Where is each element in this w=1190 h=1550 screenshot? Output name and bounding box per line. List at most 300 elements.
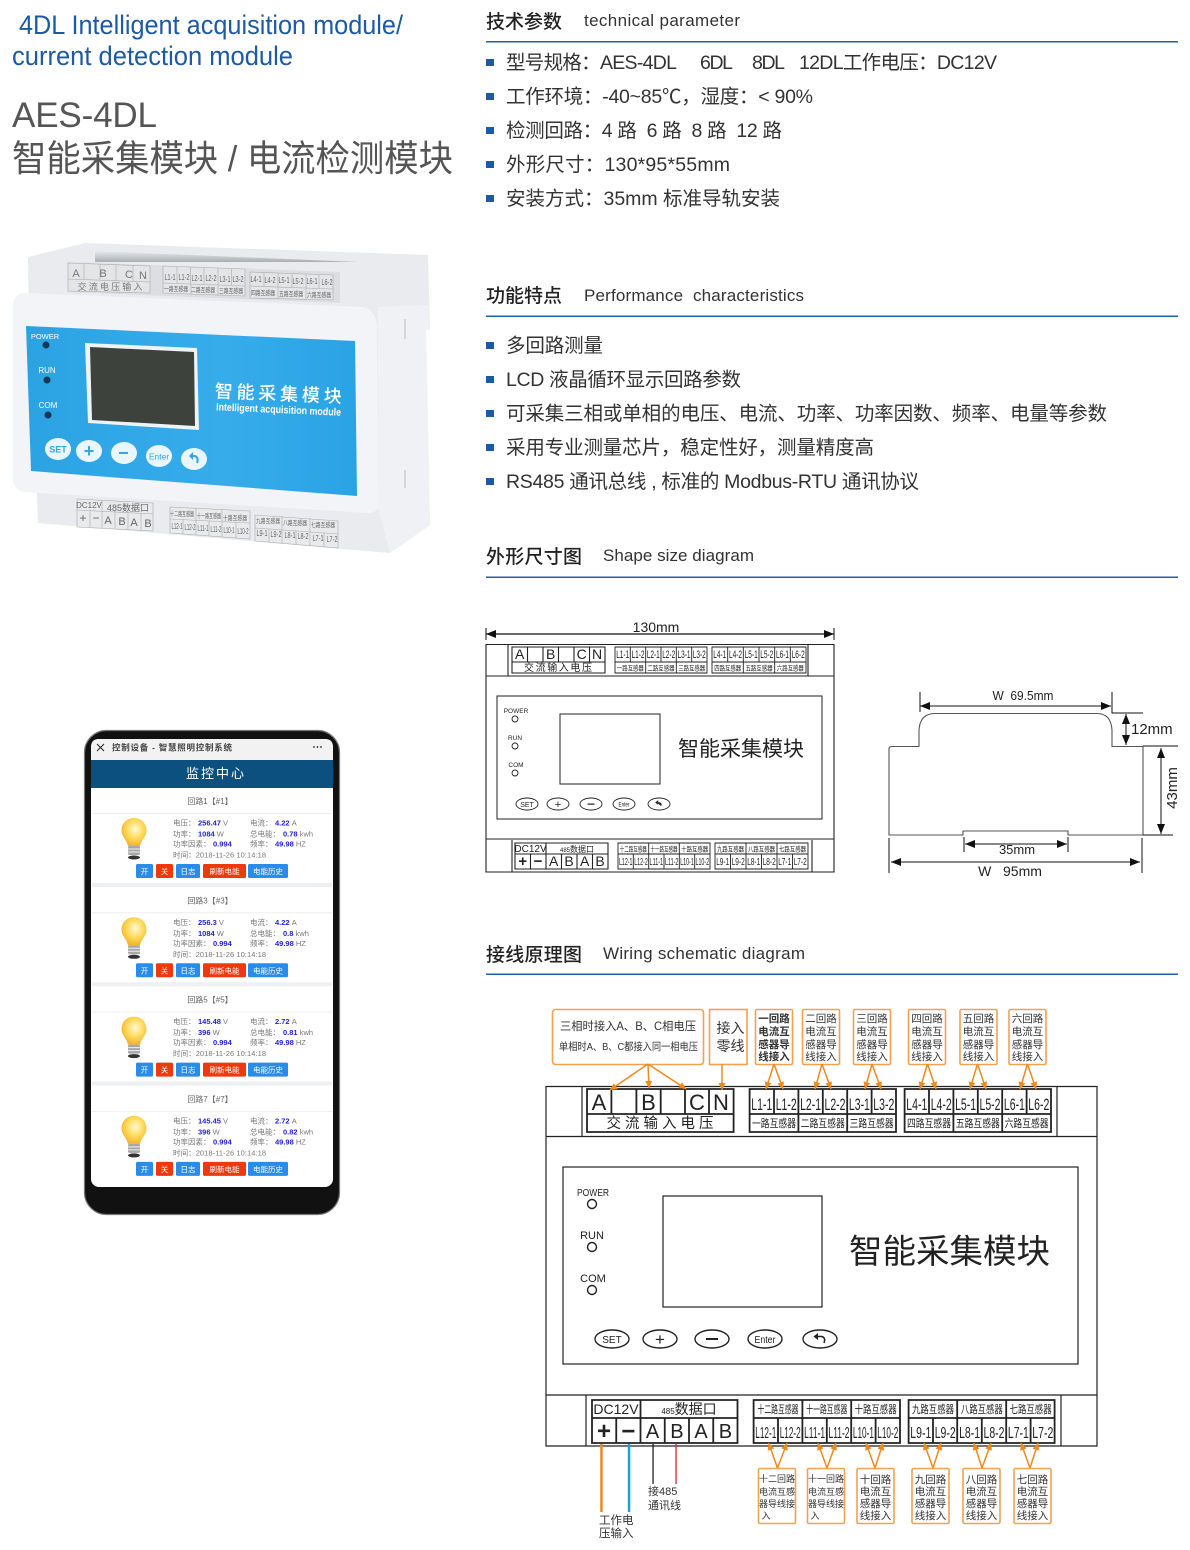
bullet list: parameters: 安装方式：35mm 标准导轨安装 — [506, 188, 780, 210]
card: circuit 3: 4.22 — [275, 918, 290, 927]
bottom terminal labels: L7-1 — [312, 534, 324, 543]
bottom terminal labels: L12-2 — [184, 523, 196, 532]
app status bar — [91, 739, 333, 760]
top terminal labels: L2-1 — [192, 274, 203, 283]
top terminal labels: 二路互感器 — [191, 285, 215, 294]
card: circuit 7: 396 — [198, 1127, 211, 1136]
top terminals: 五路互感器 — [746, 664, 772, 672]
LCD outline — [663, 1196, 822, 1307]
phone frame — [84, 730, 340, 1214]
bottom terminal labels: DC12V — [76, 501, 103, 510]
DC and RS485 terminals: − — [621, 1418, 635, 1445]
dimension: 35mm: 35mm — [999, 842, 1035, 857]
current transformer terminals 7-12: L7-1 — [1008, 1425, 1029, 1442]
callouts: circuits 7-12 — [758, 1468, 1051, 1524]
keypad: + — [555, 799, 561, 811]
card: circuit 3: 时间：2018-11-26 10:14:18 — [173, 949, 266, 959]
card: circuit 7: 开 — [141, 1165, 149, 1174]
bullet list: parameters — [486, 52, 997, 210]
card: circuit 7: 2.72 — [275, 1116, 290, 1125]
card: circuit 5: 电能历史 — [253, 1065, 283, 1075]
card: circuit 5: 功率： — [173, 1027, 196, 1037]
current transformer terminals 1-6: L4-2 — [931, 1095, 952, 1114]
bottom terminals: DC12V — [514, 844, 547, 855]
AC voltage input terminals: N — [713, 1090, 729, 1115]
card: circuit 1: 0.994 — [213, 840, 233, 848]
card: circuit 7: 电能历史 — [253, 1164, 283, 1174]
heading: wiring schematic diagram: Wiring schematic diagram — [603, 944, 805, 963]
panel logo text: Intelligent acquisition module — [216, 401, 341, 419]
panel buttons: Enter — [149, 452, 169, 462]
callouts: circuits 7-12: 线接入 — [1017, 1509, 1049, 1522]
top terminal labels: C — [125, 269, 133, 281]
keypad — [595, 1330, 837, 1349]
heading: wiring schematic diagram — [486, 944, 1178, 975]
top terminals — [512, 646, 806, 674]
top terminals: N — [592, 646, 602, 662]
top terminals: L4-2 — [729, 649, 742, 661]
callouts: circuits 7-12: 十回路 — [860, 1473, 892, 1486]
callouts: circuits 7-12: 电流互感 — [759, 1486, 795, 1497]
card: circuit 1: 电能历史 — [253, 866, 283, 876]
current transformer terminals 1-6: L3-1 — [849, 1095, 870, 1114]
callouts: circuits 7-12: 十一回路 — [808, 1473, 844, 1484]
card: circuit 7: 日志 — [180, 1164, 196, 1174]
card: circuit 1: 关 — [161, 866, 169, 876]
DC and RS485 terminals: A — [646, 1421, 660, 1443]
current transformer terminals 7-12: 十二路互感器 — [758, 1402, 798, 1416]
card: circuit 1: 日志 — [180, 866, 196, 876]
current transformer terminals 1-6: 五路互感器 — [956, 1117, 1000, 1130]
heading: technical parameter: 技术参数 — [486, 11, 562, 33]
callouts: circuits 7-12: 器导线接 — [808, 1498, 844, 1509]
diagram: wiring schematic — [546, 1010, 1097, 1540]
top terminal labels: 三路互感器 — [219, 286, 243, 295]
top terminals: L3-1 — [678, 649, 690, 661]
callouts: circuits 7-12: 感器导 — [915, 1497, 946, 1510]
callouts: circuits 1-6: 感器导 — [963, 1038, 994, 1051]
bottom terminals: L7-1 — [778, 857, 791, 868]
current transformer terminals 1-6: 一路互感器 — [752, 1117, 796, 1130]
label: working voltage input: 工作电 — [599, 1514, 634, 1527]
bullet list: parameters: 12DL工作电压：DC12V — [799, 52, 997, 74]
bottom terminals: L8-1 — [747, 857, 760, 868]
card: circuit 3: 0.8 — [283, 929, 293, 938]
bottom terminals: 九路互感器 — [717, 844, 744, 854]
top terminal labels: L2-2 — [206, 274, 217, 283]
AC voltage input terminals — [587, 1089, 734, 1132]
card: circuit 7: 功率因素： — [173, 1136, 210, 1146]
card: circuit 5: 功率因素： — [173, 1037, 210, 1047]
phone screen — [91, 739, 333, 1187]
callouts: circuits 1-6: 感器导 — [805, 1038, 837, 1051]
bottom terminal labels — [76, 499, 338, 548]
top terminals: 二路互感器 — [648, 664, 674, 672]
card: circuit 3: 刷新电能 — [210, 965, 240, 975]
bottom terminals: B — [564, 853, 574, 869]
card: circuit 3: V — [217, 918, 224, 927]
card: circuit 3: 电能历史 — [253, 965, 283, 975]
card: circuit 1: 刷新电能 — [210, 866, 240, 876]
bottom terminals: L9-2 — [732, 857, 745, 868]
bullet list: parameters: 8DL — [752, 52, 785, 74]
bottom terminals: 七路互感器 — [779, 844, 806, 854]
card: circuit 5: kwh — [298, 1028, 313, 1037]
label: working voltage input: 压输入 — [599, 1526, 634, 1540]
heading: technical parameter — [486, 11, 1178, 42]
current transformer terminals 1-6: L2-2 — [824, 1095, 846, 1114]
callouts: circuits 1-6: 感器导 — [758, 1038, 790, 1051]
bullet list: features — [486, 335, 1107, 493]
card: circuit 5: 关 — [161, 1065, 169, 1075]
card: circuit 1: 0.78 — [283, 830, 298, 838]
current transformer terminals 7-12: L11-2 — [828, 1425, 850, 1442]
status LEDs: POWER — [31, 332, 60, 341]
DC and RS485 terminals: B — [670, 1421, 684, 1443]
callouts: circuits 1-6: 线接入 — [911, 1050, 943, 1063]
title: Chinese product name — [12, 96, 453, 179]
front face — [13, 293, 378, 513]
current transformer terminals 7-12: L8-1 — [959, 1425, 980, 1442]
top terminals: L1-2 — [632, 649, 644, 661]
card: circuit 5: 电流： — [250, 1016, 272, 1026]
label: RS485 line: 通讯线 — [648, 1498, 681, 1512]
card: circuit 5: A — [290, 1017, 297, 1026]
callouts: circuits 7-12: 电流互 — [860, 1485, 891, 1498]
callouts: circuits 1-6: 感器导 — [1012, 1038, 1043, 1051]
card: circuit 5: 刷新电能 — [210, 1065, 240, 1075]
dimension: width 95mm: W 95mm — [978, 863, 1042, 879]
card: circuit 5: W — [211, 1028, 221, 1037]
card: circuit 1: 回路1【#1】 — [187, 796, 233, 806]
card: circuit 7: A — [290, 1116, 297, 1125]
card: circuit 3: 频率： — [250, 938, 272, 948]
callouts: circuits 7-12: 感器导 — [1017, 1497, 1048, 1510]
title: English product name: current detection module — [12, 41, 293, 71]
top terminal labels: L3-2 — [232, 275, 244, 284]
bottom terminal labels: + — [79, 511, 87, 525]
label: RS485 line: 接485 — [648, 1485, 677, 1498]
panel buttons: SET — [49, 444, 67, 454]
card: circuit 7: 总电能： — [250, 1126, 280, 1136]
card: circuit 7: 49.98 — [275, 1137, 294, 1146]
DC and RS485 terminals: DC12V — [593, 1401, 639, 1417]
callouts: circuits 1-6: 电流互 — [963, 1025, 994, 1038]
card: circuit 7: 电压： — [173, 1115, 196, 1125]
callouts: circuits 7-12: 八回路 — [966, 1473, 998, 1486]
card: circuit 5: 396 — [198, 1028, 211, 1037]
top terminals: 一路互感器 — [617, 664, 644, 672]
callouts: circuits 1-6: 线接入 — [856, 1050, 888, 1063]
title: Chinese product name: 智能采集模块 / 电流检测模块 — [12, 138, 453, 179]
bottom terminal labels: L11-2 — [210, 525, 222, 534]
bottom terminals: L8-2 — [763, 857, 776, 868]
status LEDs: COM — [39, 401, 58, 410]
app header — [91, 760, 333, 788]
panel: technical parameter — [486, 11, 1178, 210]
top terminals: 交流输入电压 — [524, 661, 592, 674]
current transformer terminals 1-6: L2-1 — [800, 1095, 821, 1114]
bottom terminals: L12-1 — [619, 857, 633, 868]
card: circuit 7: 0.82 — [283, 1127, 298, 1136]
dimension: 130mm — [486, 619, 834, 640]
current transformer terminals 1-6: L4-1 — [906, 1095, 927, 1114]
top terminal labels: N — [139, 270, 147, 282]
card: circuit 1: 1084 — [198, 830, 216, 838]
heading: shape size diagram: Shape size diagram — [603, 546, 754, 565]
bottom terminals: 八路互感器 — [748, 844, 775, 854]
current transformer terminals 7-12: 七路互感器 — [1010, 1403, 1052, 1416]
bottom terminals: L10-1 — [680, 857, 694, 868]
current transformer terminals 1-6: L6-2 — [1028, 1095, 1049, 1114]
callouts: circuits 7-12: 感器导 — [860, 1497, 891, 1510]
dimension: width 69.5mm: W 69.5mm — [992, 688, 1054, 703]
card: circuit 7: 时间：2018-11-26 10:14:18 — [173, 1147, 266, 1157]
bottom terminals: A — [580, 853, 590, 869]
DC and RS485 terminals — [592, 1400, 738, 1445]
bullet list: parameters: 6DL — [700, 52, 733, 74]
card: circuit 5: 日志 — [180, 1065, 196, 1075]
bottom terminal labels: 485数据口 — [107, 502, 149, 513]
top terminal labels: B — [99, 268, 107, 280]
panel buttons: + — [84, 441, 94, 461]
top terminals: L2-1 — [647, 649, 660, 661]
bottom terminal labels: A — [130, 517, 138, 529]
card: circuit 7: 频率： — [250, 1136, 272, 1146]
side profile outline — [889, 714, 1143, 835]
bullet list: parameters: 检测回路：4 路 6 路 8 路 12 路 — [506, 120, 782, 142]
card: circuit 5: 49.98 — [275, 1038, 294, 1047]
current transformer terminals 7-12: L12-1 — [755, 1425, 776, 1442]
bottom terminals: L11-2 — [665, 857, 679, 868]
card: circuit 3: 0.994 — [213, 939, 233, 948]
bullet list: features: 采用专业测量芯片，稳定性好，测量精度高 — [506, 437, 874, 459]
top terminals: 六路互感器 — [777, 664, 804, 672]
card: circuit 1: 功率： — [173, 828, 196, 838]
current transformer terminals 7-12: L7-2 — [1032, 1425, 1053, 1442]
dimension: width 95mm — [889, 838, 1142, 879]
callouts: circuits 7-12: 电流互 — [915, 1485, 946, 1498]
callout: phase voltage input: 单相时A、B、C都接入同一相电压 — [559, 1040, 698, 1053]
top terminal labels: L3-1 — [220, 275, 231, 284]
callouts: circuits 7-12: 线接入 — [860, 1509, 892, 1522]
card: circuit 5: 时间：2018-11-26 10:14:18 — [173, 1048, 266, 1058]
top terminal labels: 一路互感器 — [164, 284, 188, 293]
bottom terminals: 十二路互感器 — [620, 844, 647, 854]
callout: neutral input: 接入 — [716, 1020, 744, 1036]
product photo: acquisition module — [13, 243, 430, 553]
card: circuit 7: 功率： — [173, 1126, 196, 1136]
current transformer terminals 7-12: 八路互感器 — [961, 1403, 1003, 1416]
top terminal labels: 四路互感器 — [251, 288, 275, 297]
current transformer terminals 7-12: L8-2 — [984, 1425, 1005, 1442]
card: circuit 5: 0.994 — [213, 1038, 233, 1047]
card: circuit 1 — [92, 796, 332, 887]
DC and RS485 terminals: 485数据口 — [661, 1401, 717, 1417]
title: English product name: 4DL Intelligent acquisition module/ — [19, 10, 403, 40]
callouts: circuits 7-12: 入 — [810, 1511, 820, 1521]
top terminal labels: L1-2 — [178, 273, 190, 282]
bottom terminal labels: A — [104, 515, 112, 527]
diagram: side profile dimensions — [889, 688, 1181, 879]
callouts: circuits 1-6: 三回路 — [856, 1012, 888, 1025]
callouts: circuits 1-6: 电流互 — [805, 1025, 837, 1038]
bottom terminals: − — [534, 853, 543, 870]
bottom terminal labels: B — [144, 518, 152, 530]
bullet list: features: 可采集三相或单相的电压、电流、功率、功率因数、频率、电量等参数 — [506, 403, 1107, 425]
card: circuit 3: 回路3【#3】 — [187, 895, 233, 905]
top terminal labels: 六路互感器 — [307, 290, 331, 299]
bottom terminals — [514, 843, 808, 870]
card: circuit 5: 0.81 — [283, 1028, 298, 1037]
arrows: circuits 1-6 — [766, 1064, 1036, 1089]
bullet list: features: RS485 通讯总线 , 标准的 Modbus-RTU 通讯协议 — [506, 471, 919, 493]
current transformer terminals 7-12: 九路互感器 — [912, 1403, 954, 1416]
wires: power and RS485 — [600, 1444, 677, 1512]
LED indicators: POWER — [504, 708, 529, 715]
top terminal labels: L5-1 — [278, 276, 290, 285]
bottom terminal labels: L8-2 — [298, 532, 309, 541]
heading: wiring schematic diagram: 接线原理图 — [486, 944, 582, 966]
card: circuit 7: 电流： — [250, 1115, 272, 1125]
top terminal labels: L4-2 — [264, 276, 276, 285]
card: circuit 3: 电流： — [250, 917, 272, 927]
card: circuit 1: HZ — [294, 840, 306, 848]
AC voltage input terminals: 交流输入电压 — [606, 1114, 714, 1132]
current transformer terminals 1-6: L1-1 — [751, 1095, 772, 1114]
AC voltage input terminals: A — [592, 1090, 607, 1115]
current transformer terminals 1-6: L1-2 — [776, 1095, 797, 1114]
card: circuit 1: kwh — [298, 830, 313, 838]
bottom terminal labels: 十二路互感器 — [170, 509, 194, 518]
card: circuit 3: 功率： — [173, 928, 196, 938]
current transformer terminals 7-12: 十一路互感器 — [806, 1402, 847, 1416]
phone mockup: monitoring app — [84, 730, 340, 1214]
inner panel — [497, 696, 822, 819]
top terminal labels — [68, 263, 333, 300]
bottom terminals: L11-1 — [650, 857, 663, 868]
callouts: circuits 1-6: 线接入 — [963, 1050, 995, 1063]
LED indicators — [577, 1188, 609, 1294]
top terminals: L3-2 — [693, 649, 706, 661]
module outline — [486, 644, 834, 872]
current transformer terminals 7-12: L9-2 — [935, 1425, 956, 1442]
card: circuit 5: 电压： — [173, 1016, 196, 1026]
title: Chinese product name: AES-4DL — [12, 96, 157, 135]
callouts: circuits 1-6: 六回路 — [1012, 1012, 1044, 1025]
keypad: + — [655, 1330, 665, 1349]
card: circuit 3: 开 — [141, 966, 149, 975]
bullet list: features: 多回路测量 — [506, 335, 603, 357]
panel buttons — [45, 438, 207, 470]
LED indicators — [504, 708, 529, 776]
dimension: width 69.5mm — [920, 688, 1143, 713]
card: circuit 7: 0.994 — [213, 1137, 233, 1146]
bottom terminal labels: B — [118, 516, 126, 528]
callouts: circuits 1-6: 五回路 — [963, 1012, 995, 1025]
card: circuit 5: HZ — [294, 1038, 306, 1047]
top terminals: C — [577, 646, 587, 662]
card: circuit 7: kwh — [298, 1127, 313, 1136]
bottom terminal labels: L9-2 — [270, 530, 282, 539]
card: circuit 3: 关 — [161, 965, 169, 975]
module body — [28, 243, 430, 553]
callouts: circuits 7-12: 九回路 — [915, 1473, 947, 1486]
top terminals: B — [546, 646, 555, 662]
label: module name: 智能采集模块 — [849, 1234, 1050, 1271]
LED indicators: POWER — [577, 1188, 609, 1199]
panel logo text: 智能采集模块 — [214, 381, 342, 407]
top terminal labels: L4-1 — [250, 275, 262, 284]
card: circuit 1: 电压： — [173, 818, 196, 828]
callout: neutral input: 零线 — [716, 1038, 744, 1054]
dimension: 35mm — [964, 837, 1068, 857]
callouts: circuits 1-6: 感器导 — [911, 1038, 943, 1051]
card: circuit 7: W — [211, 1127, 221, 1136]
panel: performance characteristics — [486, 285, 1178, 493]
card: circuit 5: 总电能： — [250, 1027, 280, 1037]
keypad — [516, 798, 670, 811]
card: circuit 5: 频率： — [250, 1037, 272, 1047]
current transformer terminals 1-6: L5-2 — [980, 1095, 1000, 1114]
card: circuit 7: 关 — [161, 1164, 169, 1174]
callouts: circuits 1-6 — [756, 1010, 1046, 1064]
bottom terminal labels: L10-1 — [224, 526, 235, 535]
LED indicators: COM — [508, 762, 524, 769]
card: circuit 1: 电流： — [250, 818, 272, 828]
current transformer terminals 7-12 — [754, 1400, 1055, 1443]
status LEDs: RUN — [38, 366, 56, 375]
LCD screen — [85, 343, 199, 430]
inner panel — [563, 1167, 1078, 1364]
bottom terminals: 十路互感器 — [681, 844, 708, 854]
blue panel — [26, 326, 357, 496]
top terminals: L2-2 — [662, 649, 675, 661]
bullet list: parameters: 工作环境：-40~85℃，湿度：< 90% — [506, 86, 813, 108]
LCD outline — [560, 714, 660, 784]
keypad: Enter — [754, 1335, 776, 1346]
top terminal labels: L6-1 — [306, 277, 318, 286]
card: circuit 3: 49.98 — [275, 939, 294, 948]
title: English product name — [12, 10, 403, 71]
bottom terminals: 十一路互感器 — [650, 844, 678, 854]
card: circuit 3: 1084 — [198, 929, 216, 938]
current transformer terminals 7-12: L9-1 — [910, 1425, 931, 1442]
bottom terminal labels: L7-2 — [326, 535, 338, 544]
bottom terminal labels: − — [92, 511, 100, 525]
status LEDs — [31, 332, 60, 418]
bottom terminals: L7-2 — [794, 857, 807, 868]
card: circuit 3: HZ — [294, 939, 306, 948]
card: circuit 3: 功率因素： — [173, 938, 210, 948]
callouts: circuits 1-6: 线接入 — [758, 1050, 790, 1063]
current transformer terminals 1-6: 二路互感器 — [801, 1117, 845, 1130]
card: circuit 7: V — [221, 1116, 228, 1125]
dimension: 12mm — [1126, 714, 1178, 746]
bottom terminals: L10-2 — [696, 857, 709, 868]
card: circuit 5 — [92, 995, 332, 1086]
label: module name: 智能采集模块 — [678, 738, 804, 761]
card: circuit 1: 256.47 — [198, 818, 221, 828]
callouts: circuits 1-6: 线接入 — [805, 1050, 837, 1063]
current transformer terminals 1-6: 六路互感器 — [1005, 1117, 1049, 1130]
card: circuit 3: W — [215, 929, 225, 938]
current transformer terminals 1-6: L5-1 — [955, 1095, 976, 1114]
app header: 监控中心 — [186, 766, 244, 781]
top terminal labels: L6-2 — [322, 278, 333, 287]
card: circuit 3: 总电能： — [250, 928, 280, 938]
keypad: Enter — [618, 802, 630, 808]
